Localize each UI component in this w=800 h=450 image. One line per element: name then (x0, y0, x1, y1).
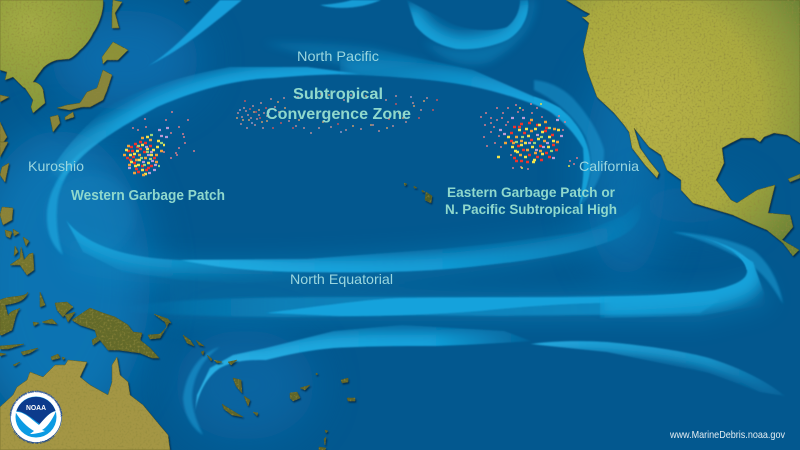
label: Subtropical Convergence Zone: Subtropical (293, 86, 383, 103)
current: North Pacific upper arc, western ribbon (60, 74, 360, 172)
land: Shikoku (65, 112, 74, 120)
land: Bismarck and Solomons (148, 314, 258, 417)
land: Borneo and Indonesia (0, 292, 75, 366)
icon: NOAA logo: NOAA (26, 403, 47, 412)
current: hook bright tip (672, 232, 753, 270)
current: North Equatorial bright streak (266, 290, 715, 316)
current: lower right streak (530, 341, 785, 396)
current: return flow western arc (62, 214, 300, 262)
current: top right crescent (405, 0, 528, 49)
current: top centre sliver (320, 0, 381, 8)
label: Eastern Garbage Patch (445, 184, 617, 217)
land: North America (566, 0, 800, 256)
land: Hawaiian islands (404, 183, 432, 203)
current: hook main (600, 243, 747, 297)
label: North Pacific: North Pacific (297, 48, 379, 64)
label: Kuroshio: Kuroshio (28, 158, 84, 174)
label: Subtropical Convergence Zone (266, 86, 411, 123)
garbage patch: eastern (480, 104, 578, 169)
land: Cuba (788, 174, 800, 182)
website url: www.MarineDebris.noaa.gov (669, 429, 786, 441)
land: Sakhalin (112, 0, 122, 28)
icon: NOAA logo: U.S. DEPARTMENT OF COMMERCE (14, 430, 55, 444)
label: North Equatorial: North Equatorial (290, 271, 393, 287)
current: hook outer (672, 232, 783, 304)
label: California: California (579, 158, 639, 174)
land: New Guinea (72, 308, 159, 358)
land: Taiwan and coast fragments (0, 95, 13, 225)
current: North Equatorial base band (130, 293, 720, 317)
land: Philippines (5, 229, 34, 275)
current: top left streak (148, 0, 242, 66)
current: southern band (195, 341, 531, 412)
current: North Pacific upper arc, eastern ribbon (340, 74, 565, 118)
label: Western Garbage Patch: Western Garbage Patch (71, 188, 225, 204)
garbage patch: middle subtropical convergence debris (236, 94, 438, 133)
current: return flow eastern band (182, 217, 630, 273)
current: top right crescent outer (423, 0, 535, 65)
current: faint western extension of the eastern ribbon (263, 43, 430, 72)
land: Kyushu (50, 115, 60, 132)
current: southern crescent outer (183, 347, 220, 435)
current: California crescent inner (534, 97, 590, 208)
garbage patch: western (123, 112, 195, 175)
current: Kuroshio curve (47, 140, 100, 255)
label: Eastern Garbage Patch: N. Pacific Subtropical High (445, 201, 617, 217)
land: Pacific islets (184, 0, 355, 450)
icon: NOAA logo (10, 390, 62, 444)
label: Subtropical Convergence Zone: Convergence Zone (266, 106, 411, 123)
land: Asia (0, 0, 103, 113)
land: Honshu (57, 70, 112, 110)
current: California crescent outer (534, 80, 604, 206)
land: Hokkaido (102, 42, 128, 64)
land: Australia (0, 357, 170, 450)
icon: NOAA logo: NATIONAL OCEANIC AND ATMOSPHERIC ADMINISTRATION (10, 390, 62, 416)
current glow halos (70, 215, 770, 322)
label: Eastern Garbage Patch: Eastern Garbage Patch or (447, 184, 616, 200)
